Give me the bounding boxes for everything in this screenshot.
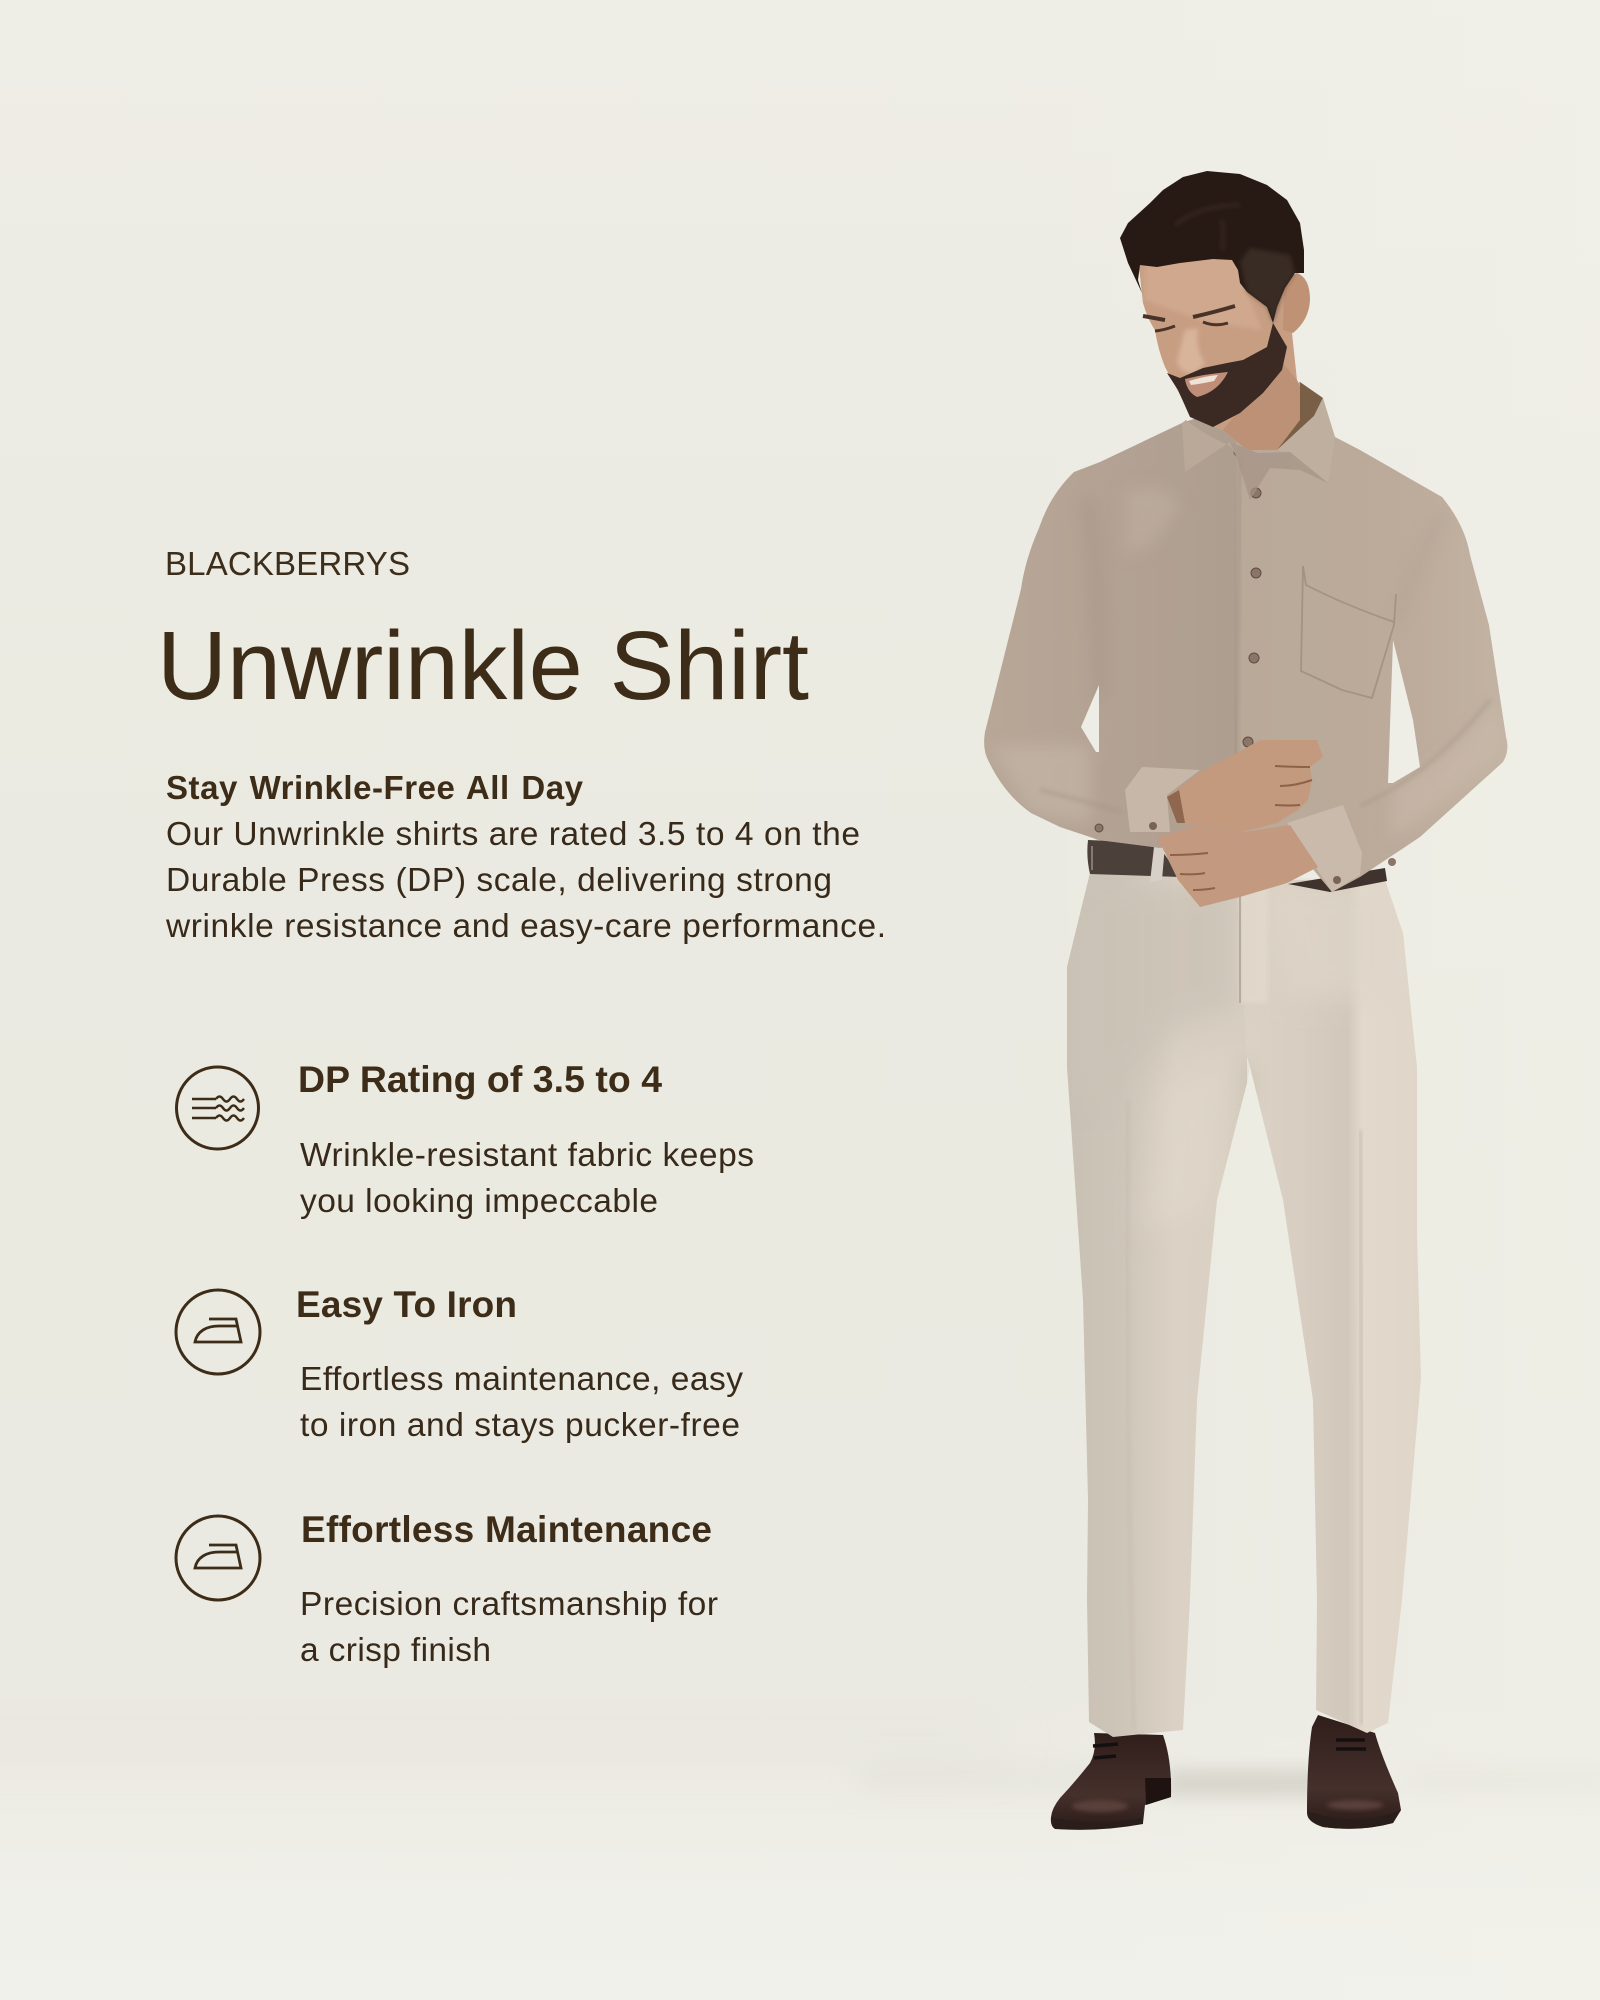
belt bbox=[1087, 840, 1387, 892]
shoes bbox=[1051, 1715, 1401, 1830]
description: Wrinkle-resistant fabric keeps bbox=[300, 1137, 754, 1174]
icon: fabric waves bbox=[176, 1067, 258, 1149]
ear bbox=[1283, 273, 1310, 333]
buttons bbox=[1095, 448, 1261, 832]
feature: easy to iron bbox=[176, 1284, 743, 1444]
shirt bbox=[984, 382, 1507, 892]
description: to iron and stays pucker-free bbox=[300, 1407, 740, 1444]
cuffs and lower sleeves bbox=[1125, 767, 1396, 892]
heading: Effortless Maintenance bbox=[301, 1509, 712, 1550]
intro text block bbox=[165, 769, 886, 945]
trousers bbox=[1067, 873, 1421, 1737]
intro text block: Durable Press (DP) scale, delivering strong bbox=[166, 862, 832, 899]
feature: DP rating bbox=[176, 1058, 754, 1220]
brand label: BLACKBERRYS bbox=[165, 545, 410, 582]
beard bbox=[1167, 323, 1287, 427]
description: Effortless maintenance, easy bbox=[300, 1361, 743, 1398]
heading: DP Rating of 3.5 to 4 bbox=[298, 1058, 662, 1100]
hands bbox=[1157, 740, 1323, 907]
title: Unwrinkle Shirt bbox=[157, 611, 809, 720]
intro text block: Stay Wrinkle-Free All Day bbox=[166, 769, 584, 806]
icon: iron bbox=[176, 1516, 260, 1600]
gap between arm and torso: right bbox=[1388, 640, 1420, 783]
illustration: model in shirt and trousers bbox=[984, 171, 1507, 1830]
collar bbox=[1182, 382, 1335, 500]
description: Precision craftsmanship for bbox=[300, 1586, 718, 1623]
description: a crisp finish bbox=[300, 1632, 491, 1669]
pocket bbox=[1301, 566, 1396, 698]
description bbox=[300, 1586, 718, 1669]
hair bbox=[1120, 171, 1304, 323]
heading: Easy To Iron bbox=[296, 1284, 517, 1325]
feature: effortless maintenance bbox=[176, 1509, 718, 1669]
gap between arm and torso: left bbox=[1081, 685, 1099, 752]
description: you looking impeccable bbox=[300, 1183, 658, 1220]
icon: iron bbox=[176, 1290, 260, 1374]
intro text block: Our Unwrinkle shirts are rated 3.5 to 4 on the bbox=[166, 816, 860, 853]
description bbox=[300, 1361, 743, 1444]
intro text block: wrinkle resistance and easy-care performance. bbox=[165, 908, 886, 945]
neck and face skin bbox=[1139, 250, 1313, 450]
description bbox=[300, 1137, 754, 1220]
